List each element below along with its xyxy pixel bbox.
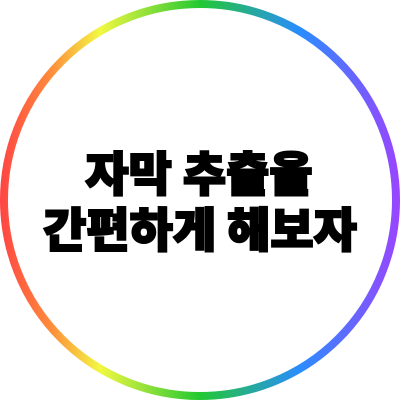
title line 1: 자막 추출을 bbox=[85, 148, 313, 201]
title bbox=[43, 148, 357, 257]
title line 2: 간편하게 해보자 bbox=[43, 204, 357, 257]
